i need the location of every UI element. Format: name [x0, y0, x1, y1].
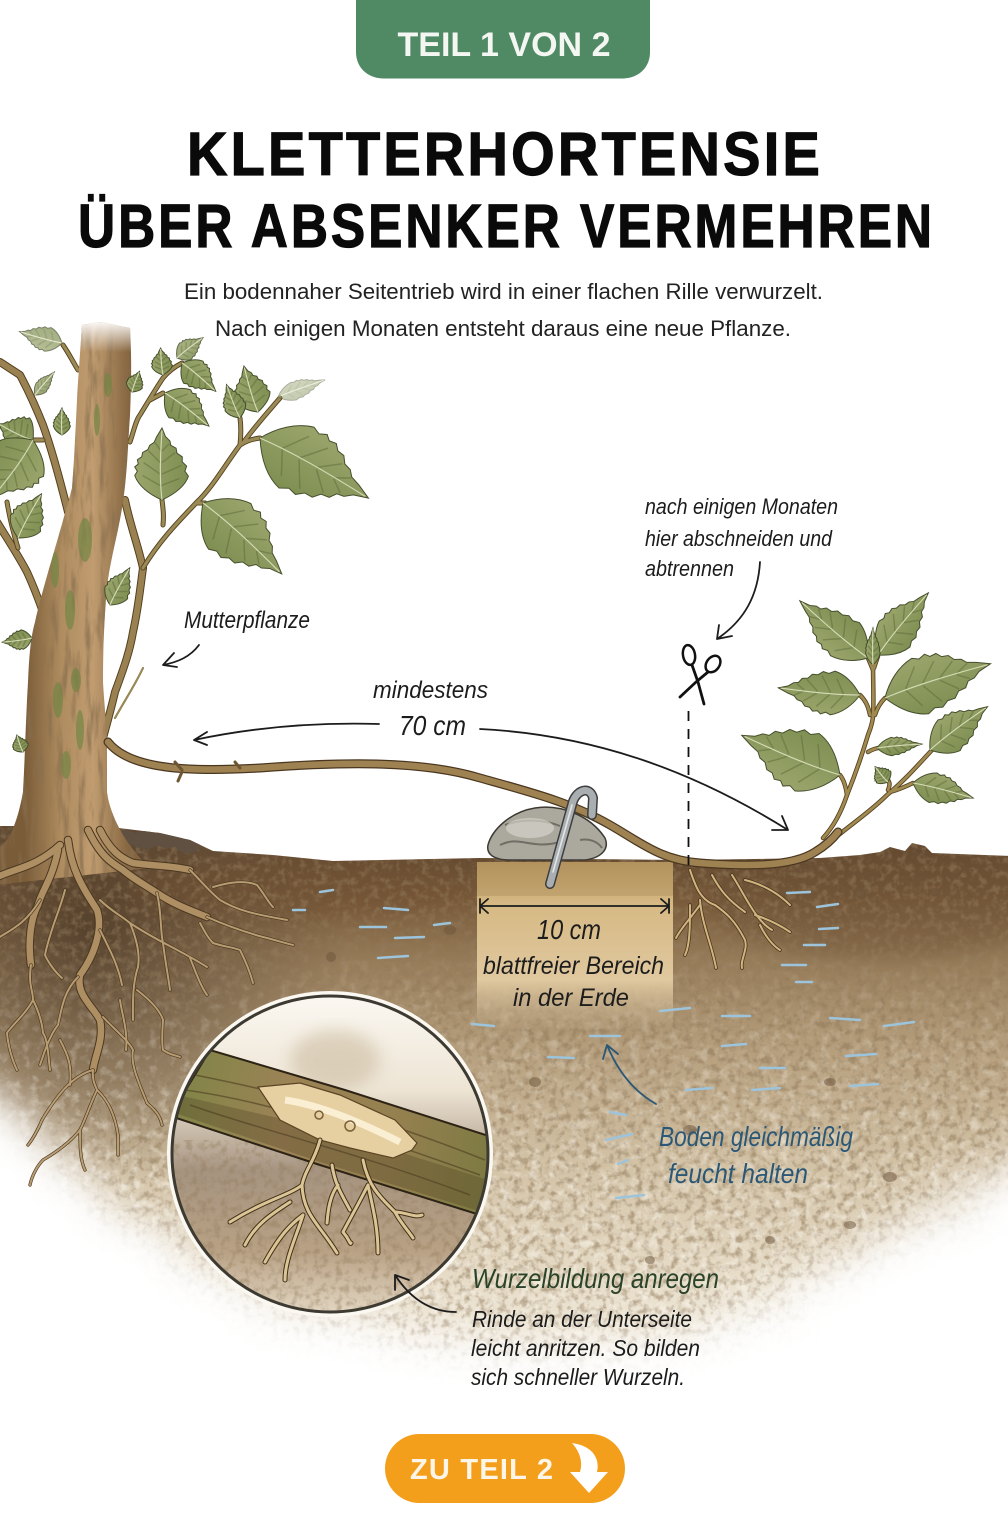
side branches of mother plant — [0, 345, 280, 738]
soil clumps at trunk base — [120, 830, 200, 853]
subtitle — [184, 279, 823, 341]
trunk — [0, 318, 150, 890]
label: distance: mindestens — [373, 677, 488, 704]
label: stimulate rooting: Rinde an der Unterseite — [472, 1306, 692, 1332]
top tab: part label — [356, 0, 650, 78]
subtitle: Ein bodennaher Seitentrieb wird in einer flachen Rille verwurzelt. — [184, 279, 823, 304]
inset roots — [230, 1140, 422, 1280]
top tab: part label: TEIL 1 VON 2 — [398, 26, 610, 64]
young plant — [730, 580, 999, 842]
label: cut here: nach einigen Monaten — [645, 494, 838, 519]
leaves of mother plant — [0, 320, 386, 755]
label: cut here: hier abschneiden und — [645, 526, 833, 551]
label: stimulate rooting: Wurzelbildung anregen — [472, 1263, 719, 1294]
label: distance: 70 cm — [399, 710, 466, 741]
label: 10 cm blattfreier Bereich: 10 cm — [537, 914, 601, 945]
icon: curved arrow — [570, 1443, 608, 1493]
soil cross-section — [0, 826, 1008, 1373]
label: keep soil moist: Boden gleichmäßig — [659, 1121, 853, 1152]
icon: scissors — [680, 644, 723, 704]
title: KLETTERHORTENSIE — [187, 120, 823, 188]
label: Mutterpflanze: Mutterpflanze — [184, 607, 310, 634]
label: stimulate rooting — [395, 1263, 719, 1390]
label: 10 cm blattfreier Bereich: blattfreier Bereich — [483, 952, 664, 980]
label: stimulate rooting: sich schneller Wurzeln. — [471, 1364, 685, 1390]
label: cut here: abtrennen — [645, 556, 734, 581]
water dashes — [293, 890, 914, 1198]
stones in soil — [326, 886, 941, 1264]
grooved planting area — [477, 862, 673, 1032]
dashed cut line — [688, 711, 690, 868]
roots of mother plant — [0, 830, 293, 1185]
stone — [488, 807, 606, 860]
inset: scored bark detail — [167, 991, 495, 1320]
label: cut here — [645, 494, 838, 639]
label: distance — [194, 677, 788, 830]
title — [78, 120, 935, 260]
branch — [170, 1050, 495, 1215]
wound — [258, 1083, 417, 1158]
button: to part 2 — [385, 1434, 625, 1503]
subtitle: Nach einigen Monaten entsteht daraus eine neue Pflanze. — [215, 316, 791, 341]
label: keep soil moist — [603, 1045, 853, 1189]
label: 10 cm blattfreier Bereich — [480, 899, 669, 1012]
mother plant — [0, 318, 386, 1185]
button: to part 2: ZU TEIL 2 — [410, 1454, 553, 1486]
layered shoot — [108, 742, 838, 865]
label: 10 cm blattfreier Bereich: in der Erde — [513, 984, 629, 1012]
label: keep soil moist: feucht halten — [668, 1158, 808, 1189]
metal pin — [550, 791, 593, 884]
label: Mutterpflanze — [163, 607, 310, 667]
label: stimulate rooting: leicht anritzen. So bilden — [471, 1335, 700, 1361]
young roots — [676, 870, 790, 968]
